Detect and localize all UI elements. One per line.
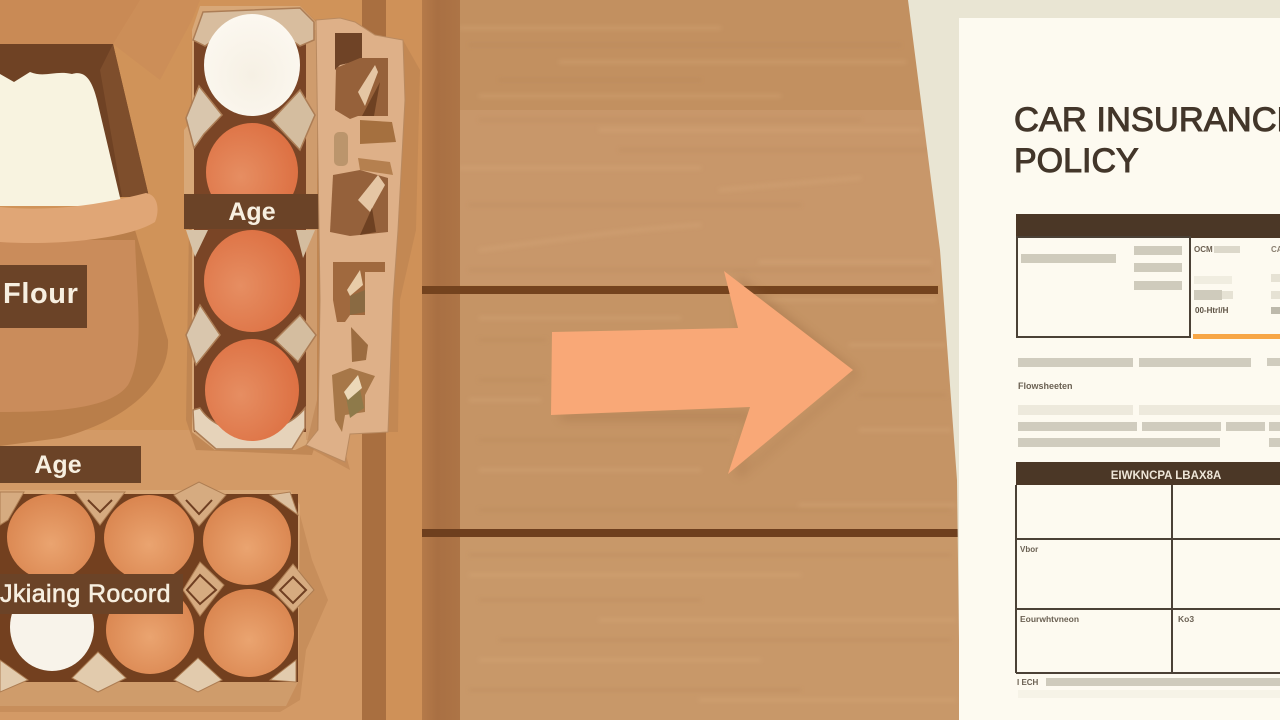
backing wall <box>908 0 1280 720</box>
coverage table: Eourwhtvneon <box>1020 614 1079 624</box>
carton pegs <box>0 482 314 692</box>
text lines: Flowsheeten <box>1018 381 1073 391</box>
egg row <box>7 494 294 677</box>
title: POLICY <box>1014 142 1139 180</box>
carton lid <box>306 18 420 470</box>
label: Age: Age <box>228 198 276 226</box>
coverage table: Ko3 <box>1178 614 1194 624</box>
coverage table: Vbor <box>1020 545 1038 554</box>
label: Flour: Flour <box>3 278 78 310</box>
horizontal egg carton <box>0 446 328 712</box>
flour <box>0 72 122 206</box>
egg: orange 1 <box>206 123 298 221</box>
footer line <box>1017 678 1280 698</box>
policy document <box>959 18 1280 720</box>
footer line: I ECH <box>1017 678 1039 687</box>
bag rim <box>0 193 158 243</box>
summary table <box>1016 214 1280 339</box>
label: Age (lower): Age <box>34 451 82 479</box>
egg: white <box>204 14 300 116</box>
label: Age <box>184 194 319 229</box>
summary table: OCM <box>1194 245 1213 254</box>
text lines <box>1018 358 1280 447</box>
label: Flour <box>0 265 87 328</box>
coverage table: EIWKNCPA LBAX8A <box>1111 470 1221 482</box>
egg: orange 2 <box>204 230 300 332</box>
arrow <box>551 271 860 478</box>
label: Age (lower) <box>0 446 141 483</box>
egg: orange 3 <box>205 339 299 441</box>
summary table: 00-Htrl/H <box>1195 306 1229 315</box>
flour bag <box>0 44 168 446</box>
label: Driving Record <box>0 574 183 614</box>
vertical egg carton <box>184 6 320 455</box>
label: Driving Record: Jkiaing Rocord <box>0 580 171 608</box>
wooden table background <box>422 0 962 720</box>
coverage table <box>1016 462 1280 673</box>
left wooden board <box>0 0 422 720</box>
title <box>1014 101 1280 180</box>
